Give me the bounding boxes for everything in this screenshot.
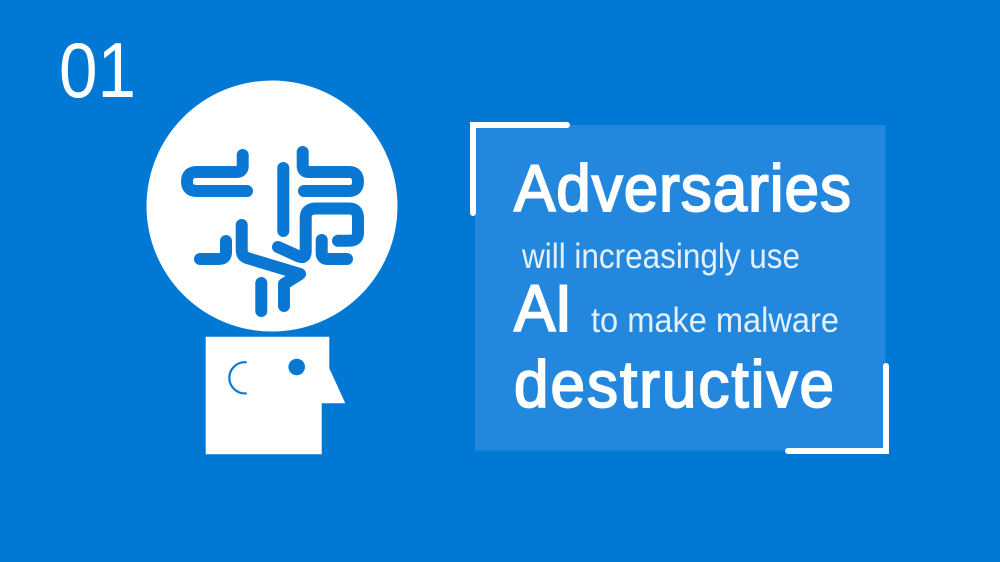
slide number: 01 (59, 26, 136, 114)
panel: headline box (475, 125, 886, 450)
icon: ear (229, 362, 247, 393)
headline word: AI: AI (514, 271, 572, 345)
headline word: destructive: destructive (514, 347, 834, 421)
brain maze lines (187, 152, 358, 311)
headline word: Adversaries: Adversaries (514, 151, 851, 225)
frame corner: top left (473, 125, 567, 213)
icon: head silhouette (206, 337, 345, 454)
frame corner: bottom right (788, 366, 886, 451)
text: to make malware: to make malware (591, 301, 839, 340)
icon: brain circle (146, 80, 398, 332)
headline text (514, 151, 851, 421)
text: will increasingly use: will increasingly use (521, 237, 800, 276)
icon: head with brain maze (146, 80, 398, 454)
icon: eye (288, 359, 305, 375)
